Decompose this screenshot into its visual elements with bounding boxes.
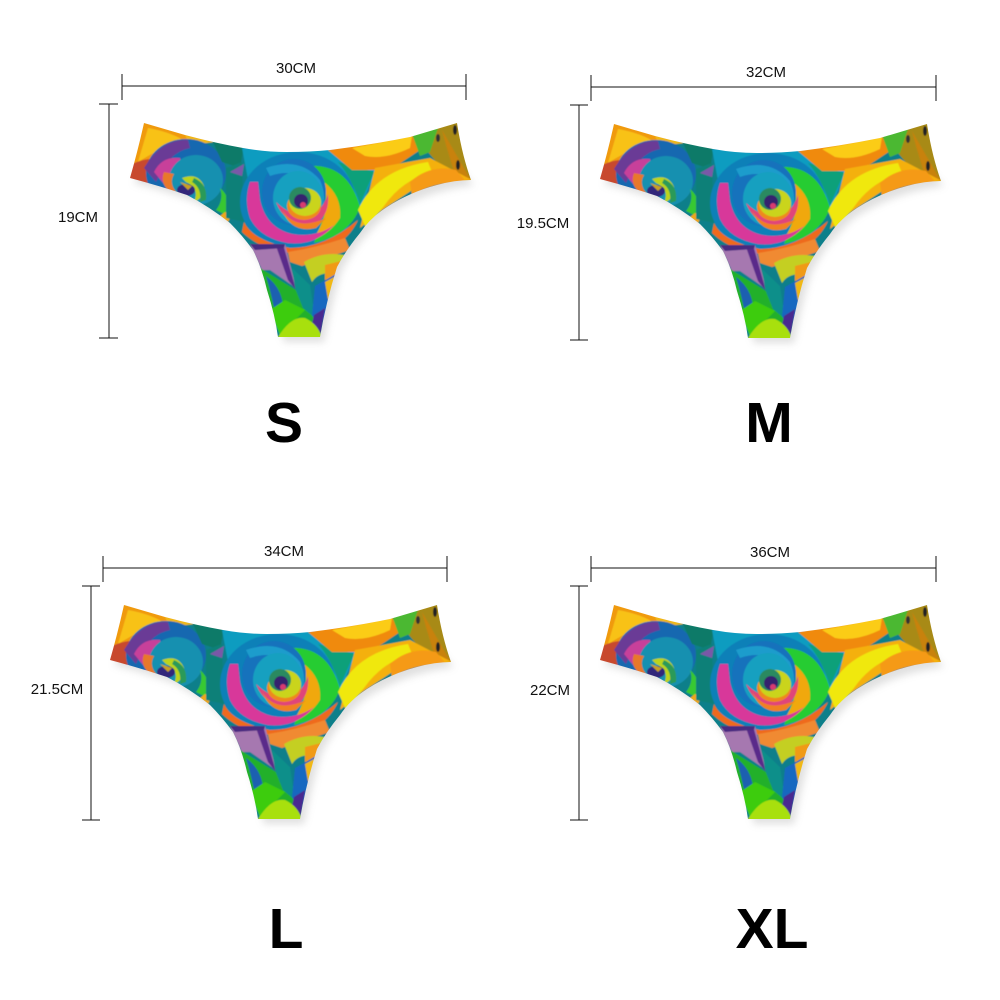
width dimension M bbox=[591, 64, 936, 101]
height dimension XL: 22CM bbox=[530, 682, 570, 699]
width dimension S: 30CM bbox=[276, 60, 316, 77]
size label L: L bbox=[269, 897, 303, 961]
width dimension S bbox=[122, 60, 466, 100]
height dimension M bbox=[517, 105, 588, 340]
size label S: S bbox=[265, 391, 303, 455]
width dimension XL bbox=[591, 544, 936, 582]
panel: size M bbox=[517, 64, 950, 455]
size label XL: XL bbox=[736, 897, 808, 961]
garment image M bbox=[590, 111, 950, 351]
panel: size XL bbox=[530, 544, 950, 961]
width dimension L bbox=[103, 543, 447, 582]
garment image XL bbox=[590, 592, 950, 832]
width dimension XL: 36CM bbox=[750, 544, 790, 561]
height dimension S: 19CM bbox=[58, 209, 98, 226]
garment image L bbox=[100, 592, 460, 832]
garment image S bbox=[120, 110, 480, 350]
height dimension M: 19.5CM bbox=[517, 215, 569, 232]
size label M: M bbox=[745, 391, 793, 455]
panel: size S bbox=[58, 60, 480, 455]
width dimension M: 32CM bbox=[746, 64, 786, 81]
width dimension L: 34CM bbox=[264, 543, 304, 560]
height dimension XL bbox=[530, 586, 588, 820]
height dimension L bbox=[31, 586, 100, 820]
panel: size L bbox=[31, 543, 460, 961]
height dimension S bbox=[58, 104, 118, 338]
height dimension L: 21.5CM bbox=[31, 681, 83, 698]
